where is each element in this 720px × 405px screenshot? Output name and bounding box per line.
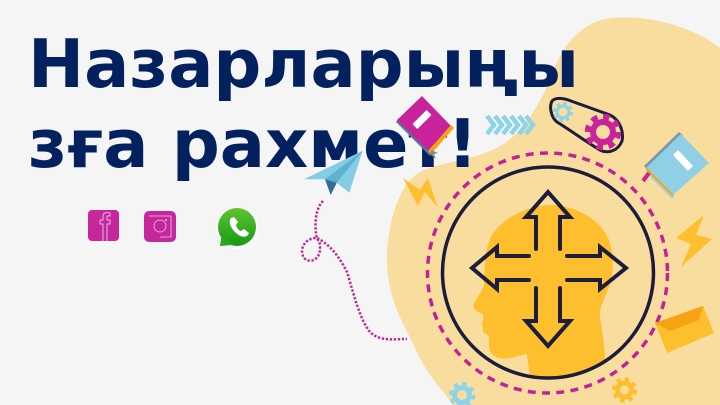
envelope [655, 306, 714, 353]
dashed ring [428, 153, 668, 393]
dotted flight path [302, 201, 407, 339]
title: Назарларыңы [28, 25, 579, 103]
book blue [643, 132, 709, 199]
four-way arrows [472, 192, 626, 346]
icon: belt with gears [551, 98, 622, 152]
circle outline [442, 167, 654, 378]
lightning left [403, 178, 438, 208]
head silhouette [473, 205, 613, 378]
icon: facebook [88, 210, 119, 241]
paper plane [304, 151, 363, 195]
title [28, 25, 579, 183]
book magenta [396, 96, 454, 159]
title: зға рахмет! [28, 105, 478, 183]
chevrons [487, 116, 533, 134]
icon: whatsapp [215, 206, 259, 250]
small blue gear [554, 104, 572, 120]
icon: yellow gear [614, 379, 636, 401]
lightning right [676, 215, 712, 267]
icon: instagram [144, 211, 176, 242]
icon: blue gear [450, 384, 474, 405]
icon: magenta gear [588, 116, 618, 148]
